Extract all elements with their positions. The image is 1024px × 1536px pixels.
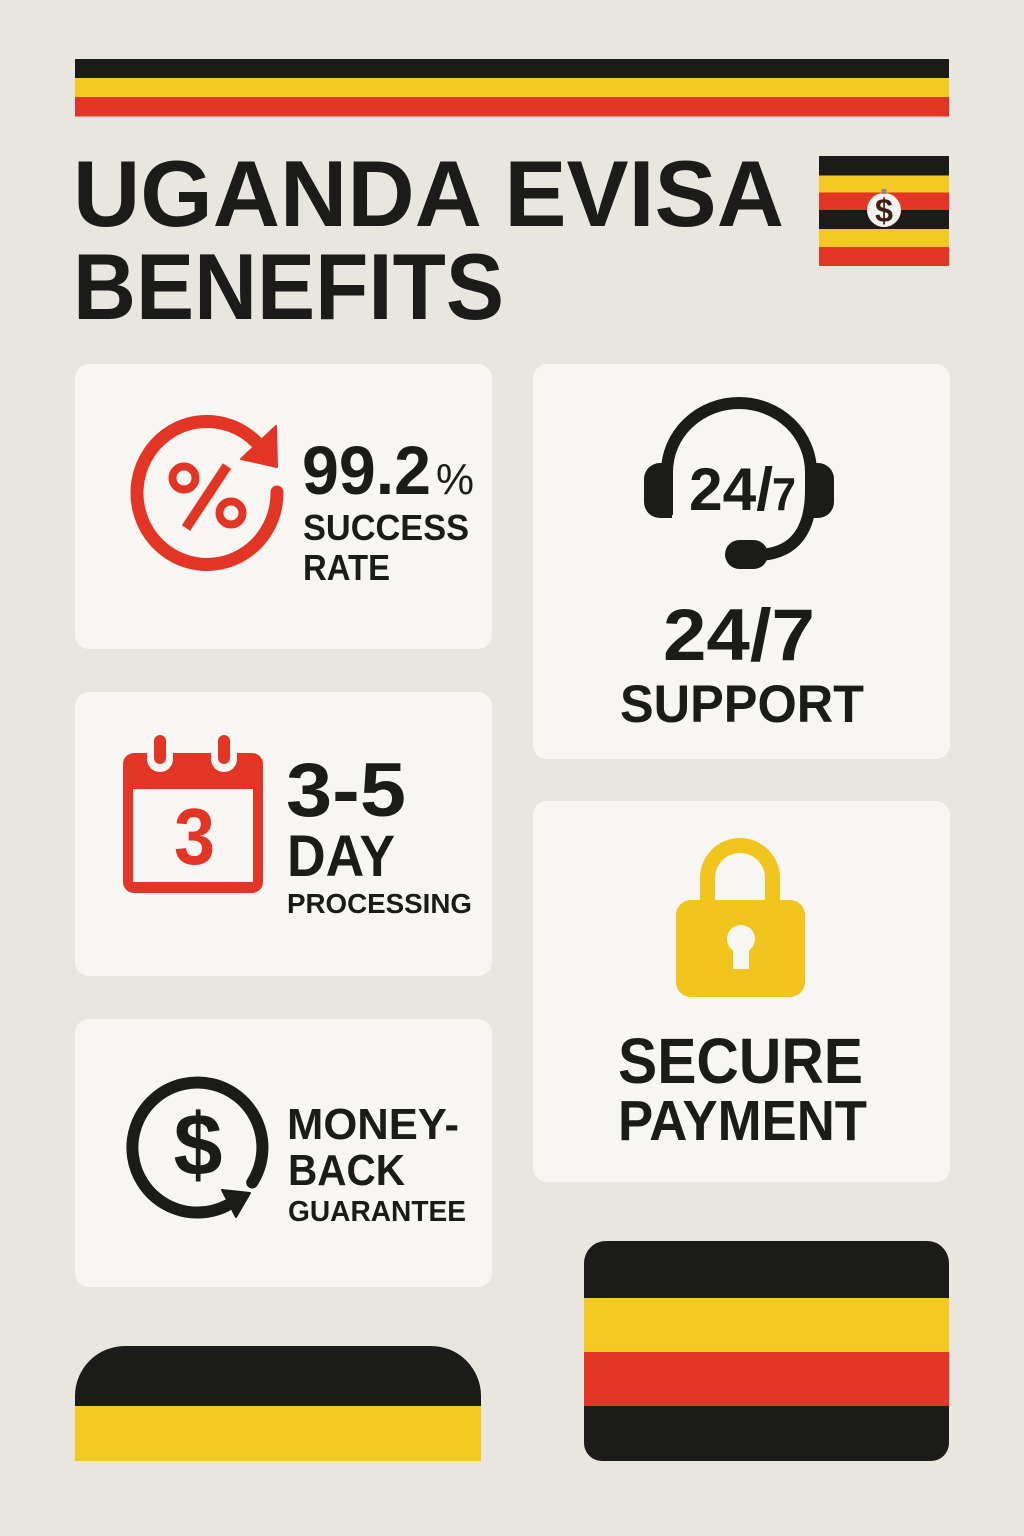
stat: 99.2%: % (436, 455, 474, 504)
icon: dollar in circular arrow (132, 1083, 262, 1217)
label: money-back guarantee: MONEY- (287, 1100, 459, 1149)
label: success rate: SUCCESS (303, 507, 469, 548)
label: success rate (303, 507, 469, 588)
label: processing: PROCESSING (287, 888, 472, 919)
icon: padlock (676, 846, 805, 997)
icon: headset: 7 (772, 468, 796, 520)
title: BENEFITS (73, 234, 504, 339)
label: money-back guarantee: BACK (288, 1146, 405, 1195)
icon: calendar: 3 (174, 792, 215, 881)
panel: success rate (75, 364, 492, 649)
panel: processing time (75, 692, 492, 976)
title (73, 141, 784, 339)
label: 24/7 support: SUPPORT (620, 675, 864, 734)
label: 24/7 support: 24/7 (663, 595, 815, 676)
icon: Uganda flag with emblem: $ (875, 192, 893, 229)
stat: 3-5 day (286, 748, 406, 889)
icon: dollar in circular arrow: $ (174, 1095, 222, 1194)
icon: Uganda flag with emblem (819, 156, 949, 266)
label: money-back guarantee: GUARANTEE (288, 1196, 466, 1228)
icon: headset (644, 403, 834, 569)
label: secure payment: PAYMENT (618, 1089, 867, 1153)
panel: secure payment (533, 801, 950, 1182)
panel: money-back guarantee (75, 1019, 492, 1287)
icon: headset: 24/ (689, 456, 773, 523)
label: money-back guarantee (287, 1100, 466, 1228)
panel: 24/7 support (533, 364, 950, 759)
stat: 3-5 day: DAY (287, 824, 395, 889)
label: 24/7 support (620, 595, 864, 734)
decorative flag block: bottom left (75, 1346, 481, 1461)
stat: 99.2%: 99.2 (302, 432, 431, 509)
icon: calendar (123, 735, 263, 893)
top tricolour stripe (75, 59, 949, 116)
decorative flag block: bottom right (584, 1241, 949, 1461)
label: success rate: RATE (303, 547, 390, 588)
title: UGANDA EVISA (73, 141, 784, 246)
label: secure payment: SECURE (618, 1025, 863, 1097)
icon: percent in circular arrow (137, 421, 277, 564)
stat: 3-5 day: 3-5 (286, 748, 406, 833)
label: secure payment (618, 1025, 867, 1153)
